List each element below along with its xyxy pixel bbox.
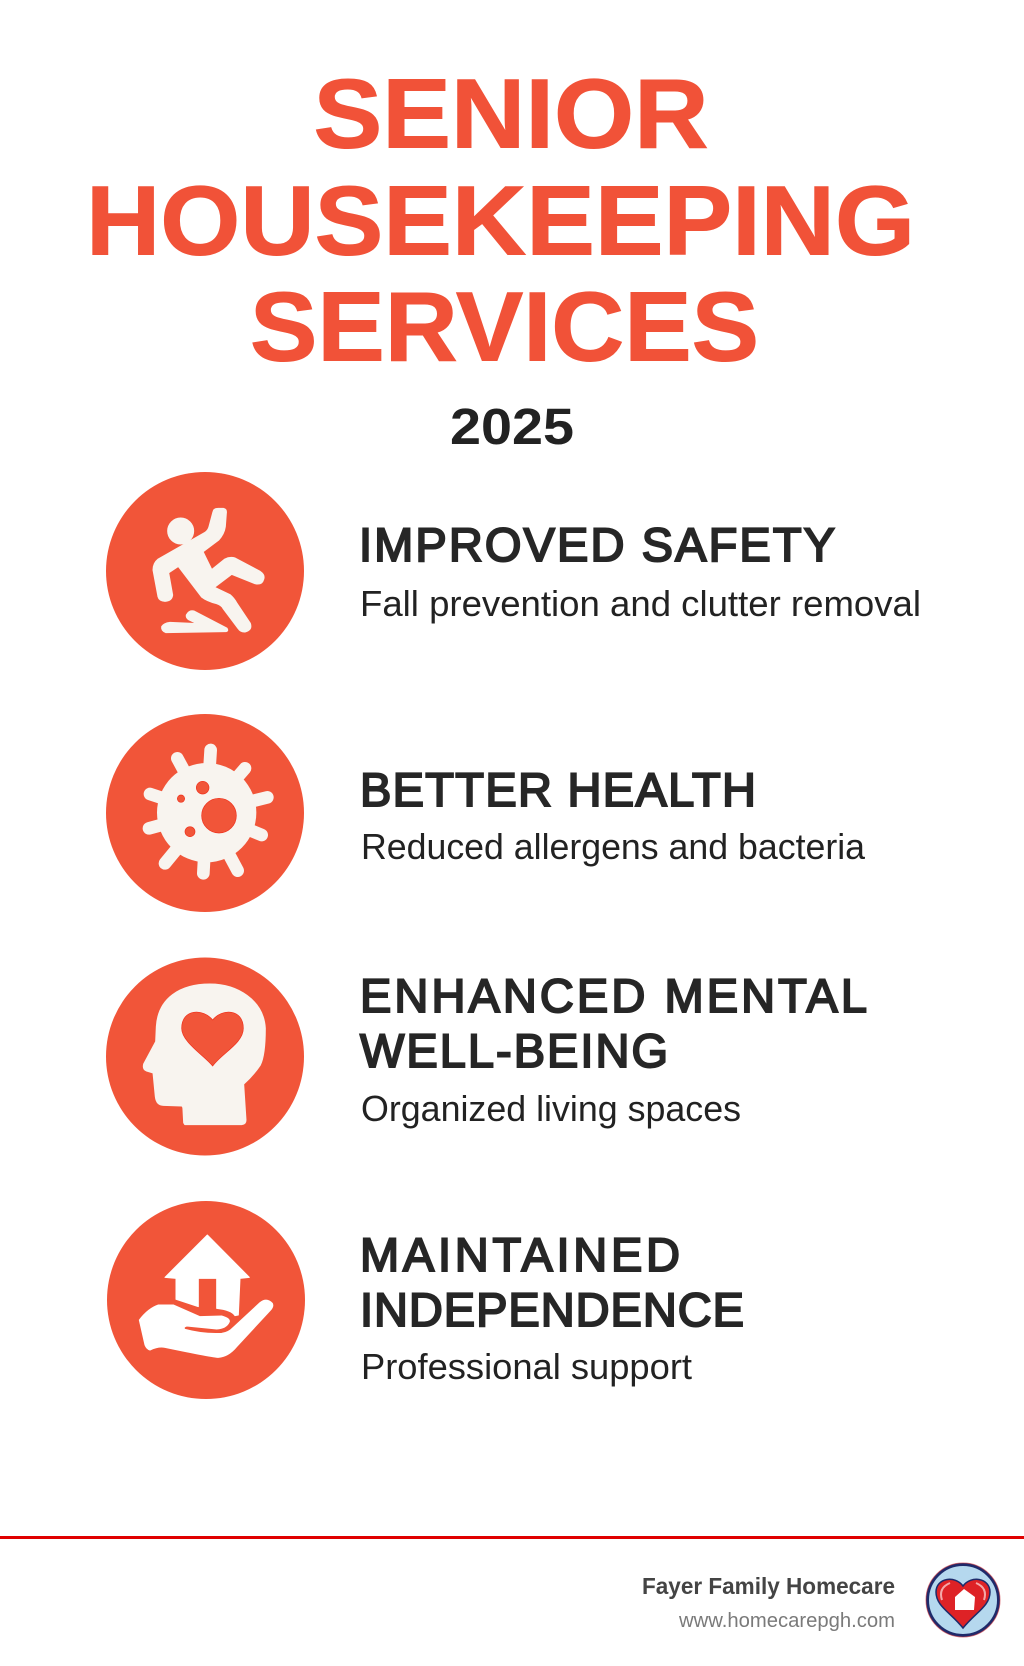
heading bbox=[360, 1228, 744, 1336]
panel: improved safety bbox=[106, 472, 921, 670]
panel: better health bbox=[106, 714, 866, 912]
heading bbox=[360, 969, 867, 1077]
heading: IMPROVED SAFETY bbox=[359, 518, 835, 571]
title: HOUSEKEEPING bbox=[86, 166, 915, 276]
heading: MAINTAINED bbox=[360, 1228, 680, 1281]
icon: head with heart bbox=[106, 958, 304, 1156]
icon: virus bbox=[106, 714, 304, 912]
icon: person slipping bbox=[106, 472, 304, 670]
footer bbox=[642, 1563, 1000, 1637]
heading: INDEPENDENCE bbox=[360, 1283, 744, 1336]
description: Professional support bbox=[361, 1346, 692, 1387]
title: SERVICES bbox=[250, 272, 759, 382]
description: Fall prevention and clutter removal bbox=[360, 583, 921, 624]
website: www.homecarepgh.com bbox=[678, 1610, 895, 1632]
description: Organized living spaces bbox=[361, 1088, 741, 1129]
panel: maintained independence bbox=[107, 1201, 744, 1399]
heading: ENHANCED MENTAL bbox=[360, 969, 867, 1022]
year subtitle: 2025 bbox=[450, 398, 574, 455]
brand name: Fayer Family Homecare bbox=[642, 1573, 895, 1599]
panel: enhanced mental well-being bbox=[106, 958, 867, 1156]
heading: BETTER HEALTH bbox=[360, 763, 756, 816]
icon: house in hand bbox=[107, 1201, 305, 1399]
heading: WELL-BEING bbox=[360, 1024, 668, 1077]
title: SENIOR bbox=[314, 58, 708, 168]
title bbox=[86, 58, 915, 382]
description: Reduced allergens and bacteria bbox=[361, 826, 866, 867]
icon: logo bbox=[926, 1563, 1000, 1637]
